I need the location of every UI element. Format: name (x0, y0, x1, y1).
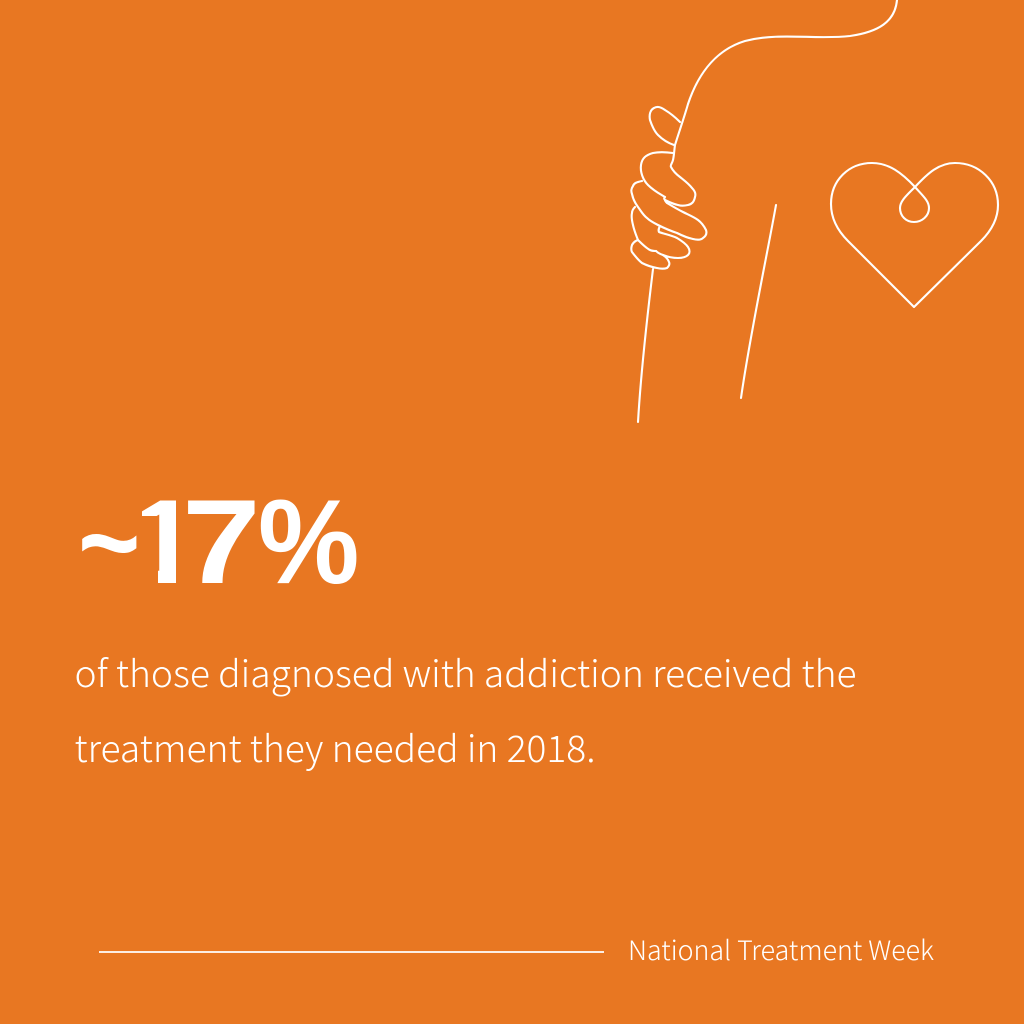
footer divider line (99, 951, 604, 953)
body text (74, 644, 856, 773)
footer label: National Treatment Week (628, 929, 934, 968)
headline statistic: 1 (129, 475, 201, 609)
illustration: arm and gripping hand (631, 0, 897, 422)
headline statistic: ~ (78, 475, 140, 609)
body text: treatment they needed in 2018. (74, 719, 596, 773)
headline statistic: 7 (182, 474, 261, 609)
icon: heart with loop (831, 163, 998, 307)
headline statistic: % (258, 474, 359, 609)
headline statistic (82, 500, 356, 584)
body text: of those diagnosed with addiction received the (74, 644, 856, 698)
